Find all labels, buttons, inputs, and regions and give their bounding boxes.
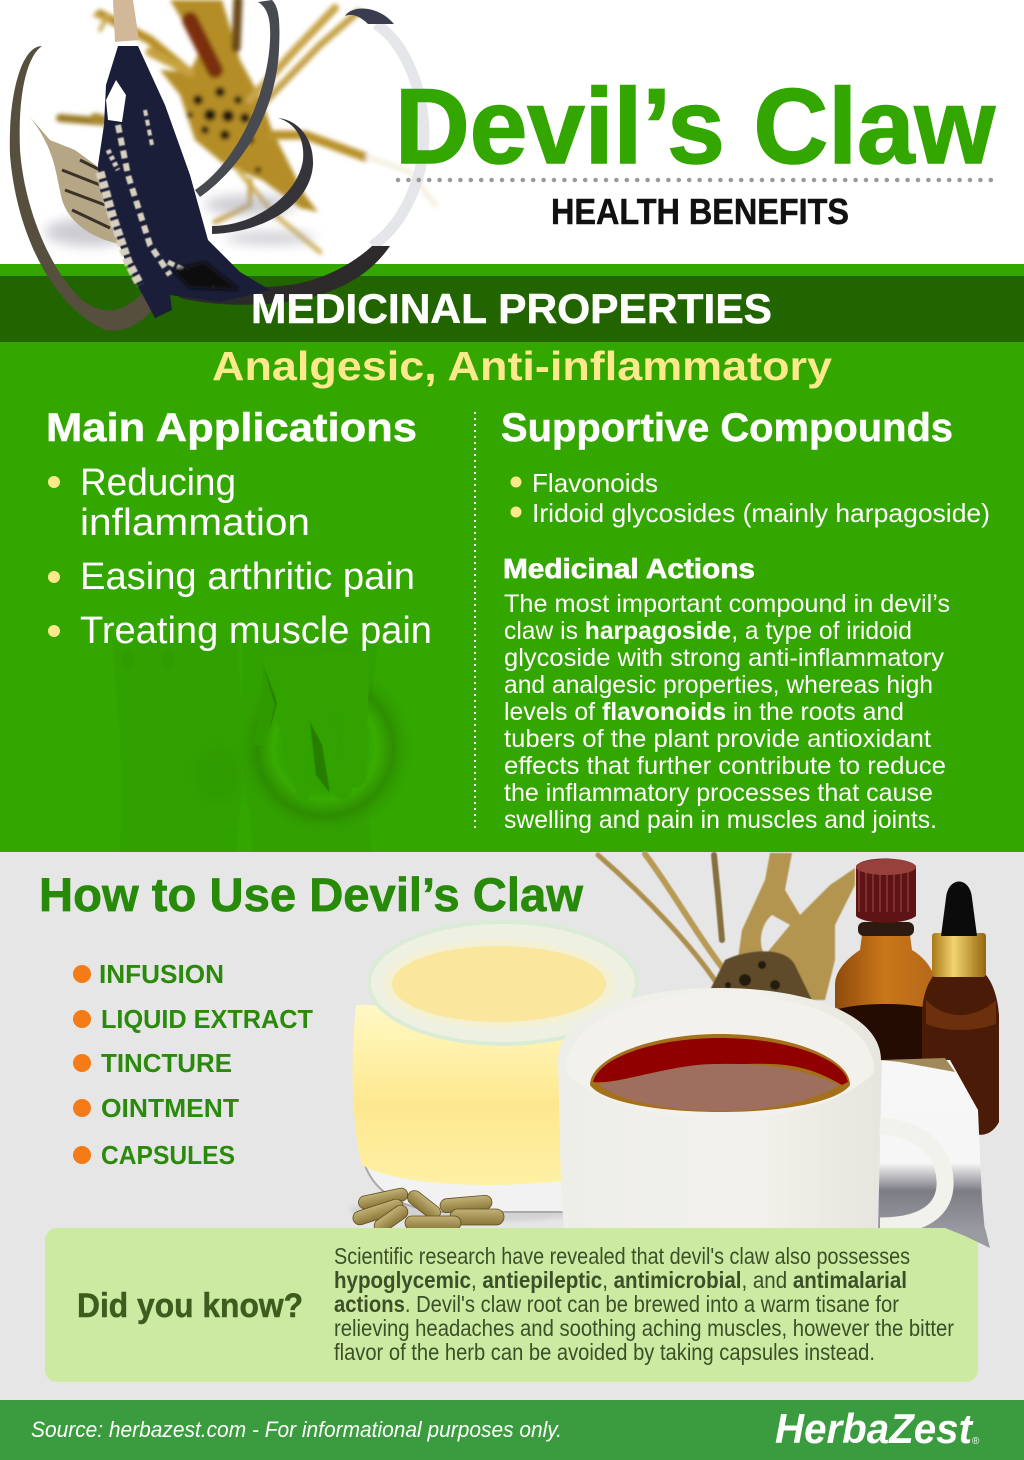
- heading: main applications: Main Applications: [46, 406, 417, 450]
- list: applications: Treating muscle pain: [80, 610, 432, 652]
- icon: long left claw: [10, 46, 170, 331]
- list: forms of use: OINTMENT: [101, 1093, 239, 1123]
- heading: supportive compounds: Supportive Compounds: [501, 406, 953, 450]
- callout text: Scientific research have revealed that devil's claw also possesses: [334, 1243, 910, 1269]
- dropper black bulb: [941, 882, 977, 936]
- image: cream jar: [350, 922, 640, 1222]
- footer background: [0, 1400, 1024, 1460]
- heading: medicinal properties: MEDICINAL PROPERTIES: [251, 285, 772, 332]
- title: Devil’s Claw: [395, 66, 996, 186]
- list: applications: Reducing: [80, 462, 236, 504]
- image: devil's claw seed pod: [10, 0, 424, 331]
- image: root behind the products: [598, 853, 855, 1000]
- image: faded knee and hand behind the applications list: [112, 640, 417, 852]
- panel: green medicinal section background: [0, 264, 1024, 852]
- tea bag tag: [880, 1058, 955, 1072]
- callout: did you know: [45, 1228, 990, 1382]
- image: dropper bottle: [922, 882, 999, 1135]
- bottle red cap: [856, 858, 916, 923]
- list: applications: inflammation: [80, 502, 310, 544]
- mug inner edge: [590, 1034, 850, 1112]
- list: forms of use: INFUSION: [99, 959, 224, 989]
- panel: grey usage section background: [0, 852, 1024, 1400]
- text: medicinal actions description: the inflammatory processes that cause: [504, 779, 933, 807]
- band: medicinal properties dark strip: [0, 276, 1024, 342]
- list: compounds: Iridoid glycosides (mainly harpagoside): [532, 498, 990, 528]
- list: applications: Easing arthritic pain: [80, 556, 415, 598]
- subheading: properties: Analgesic, Anti-inflammatory: [212, 343, 832, 389]
- icon: long right claw: [170, 246, 390, 305]
- bottle neck: [858, 922, 914, 936]
- image: capsules: [351, 1187, 504, 1236]
- list: forms of use: LIQUID EXTRACT: [101, 1004, 313, 1034]
- text: medicinal actions description: tubers of the plant provide antioxidant: [504, 725, 931, 753]
- jar rim glass: [369, 922, 637, 1044]
- callout text: hypoglycemic, antiepileptic, antimicrobial, and antimalarial: [334, 1267, 907, 1293]
- pod texture: [100, 110, 215, 285]
- callout background: [45, 1228, 978, 1382]
- dropper bottle body: [922, 975, 999, 1135]
- list: compounds: Flavonoids: [532, 468, 658, 498]
- panel: main applications: [46, 406, 432, 652]
- panel: supportive compounds: [501, 406, 990, 834]
- cap ribs: [858, 868, 914, 912]
- registered mark: ®: [972, 1436, 980, 1447]
- image: tea mug: [558, 988, 945, 1228]
- text: medicinal actions description: levels of flavonoids in the roots and: [504, 698, 904, 726]
- panel: white header background: [0, 0, 1024, 264]
- mug rim: [566, 994, 874, 1118]
- jar cream surface: [392, 946, 606, 1022]
- text: medicinal actions description: swelling and pain in muscles and joints.: [504, 806, 937, 834]
- text: medicinal actions description: effects that further contribute to reduce: [504, 752, 946, 780]
- icon: faded claw arc over title: [372, 24, 424, 246]
- icon: central dark pod body: [98, 46, 270, 318]
- tea bag corner over the callout: [945, 1228, 990, 1248]
- jar shadow: [350, 1198, 590, 1222]
- list: forms of use: CAPSULES: [101, 1140, 235, 1170]
- vertical dotted divider: [474, 412, 476, 832]
- footer: [0, 1400, 1024, 1460]
- icon: small inner claw: [212, 118, 313, 234]
- bottle shoulders and body: [835, 935, 935, 1060]
- callout text: relieving headaches and soothing aching muscles, however the bitter: [334, 1315, 954, 1341]
- icon: back claw rising to the top: [195, 0, 279, 197]
- tea surface: [593, 1038, 848, 1085]
- icon: beige side pod: [30, 117, 125, 245]
- list: forms of use: TINCTURE: [101, 1048, 232, 1078]
- source note: Source: herbazest.com - For informational purposes only.: [31, 1417, 562, 1442]
- text: medicinal actions description: The most important compound in devil’s: [504, 590, 950, 618]
- callout text: actions. Devil's claw root can be brewed into a warm tisane for: [334, 1291, 899, 1317]
- mug handle: [838, 1126, 945, 1226]
- list: forms of use: [73, 959, 313, 1170]
- callout text: [334, 1243, 954, 1365]
- bottle liquid: [835, 1004, 935, 1060]
- subtitle: HEALTH BENEFITS: [551, 191, 849, 232]
- jar body: [353, 1005, 640, 1185]
- callout heading: Did you know?: [77, 1287, 303, 1325]
- list: compounds: [510, 468, 990, 528]
- callout text: flavor of the herb can be avoided by taking capsules instead.: [334, 1339, 875, 1365]
- icon: stem: [113, 0, 139, 42]
- heading: medicinal actions: Medicinal Actions: [503, 553, 755, 584]
- tea reflection: [598, 1064, 840, 1111]
- image: drop shadow under the claw: [45, 195, 315, 246]
- pod dark base: [172, 262, 240, 290]
- jar inner glass: [383, 940, 615, 1028]
- dropper gold collar: [932, 933, 986, 977]
- pod window: [106, 80, 126, 122]
- text: medicinal actions description: [504, 590, 950, 834]
- dotted title divider: [398, 178, 993, 182]
- list: applications: [48, 462, 432, 652]
- image: tea bag: [878, 1058, 985, 1232]
- jar base: [358, 1130, 570, 1212]
- text: medicinal actions description: glycoside with strong anti-inflammatory: [504, 644, 945, 672]
- mug body: [558, 988, 881, 1228]
- dropper highlight: [926, 1000, 996, 1030]
- text: medicinal actions description: claw is harpagoside, a type of iridoid: [504, 617, 912, 645]
- heading: how to use: How to Use Devil’s Claw: [39, 868, 583, 921]
- logo: HerbaZest: HerbaZest: [775, 1405, 974, 1452]
- text: medicinal actions description: and analgesic properties, whereas high: [504, 671, 933, 699]
- image: amber bottle: [835, 858, 935, 1060]
- cap top: [856, 859, 916, 875]
- tea bag paper: [878, 1060, 985, 1232]
- pod stripes: [62, 160, 110, 228]
- image: blurred devil's claw root: [60, 0, 435, 252]
- icon: claw tip at top right: [345, 9, 394, 24]
